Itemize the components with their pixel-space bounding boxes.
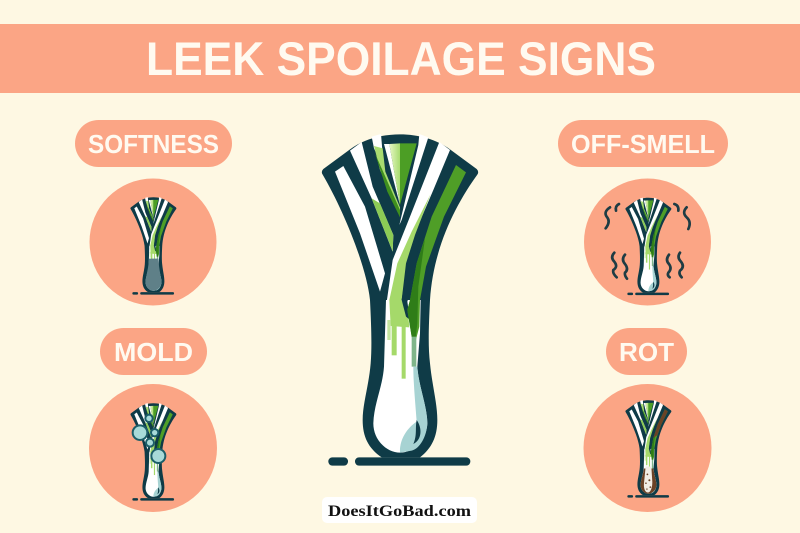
- mold label: MOLD: [114, 337, 193, 367]
- icon: soft grey leek: [130, 197, 176, 295]
- softness label: [75, 120, 232, 167]
- icon: leek with mold spots: [130, 403, 176, 501]
- rot label: [606, 328, 687, 375]
- watermark badge: [322, 497, 477, 523]
- off-smell label: OFF-SMELL: [571, 129, 715, 159]
- mold label: [100, 328, 207, 375]
- off-smell label: [558, 120, 728, 167]
- icon: rotting leek: [625, 400, 671, 498]
- watermark badge: DoesItGoBad.com: [328, 503, 472, 520]
- title banner: [0, 24, 800, 93]
- main leek illustration: [322, 134, 478, 466]
- panel: mold: [89, 328, 217, 512]
- rot label: ROT: [619, 337, 674, 367]
- softness circle: [90, 178, 216, 306]
- panel: softness: [75, 120, 232, 306]
- rot circle: [584, 384, 712, 512]
- icon: leek with odour lines: [606, 198, 690, 295]
- mold circle: [89, 384, 217, 512]
- off-smell circle: [584, 178, 711, 306]
- panel: rot: [584, 328, 712, 512]
- title banner: LEEK SPOILAGE SIGNS: [146, 32, 656, 85]
- panel: off-smell: [558, 120, 728, 306]
- softness label: SOFTNESS: [88, 129, 219, 159]
